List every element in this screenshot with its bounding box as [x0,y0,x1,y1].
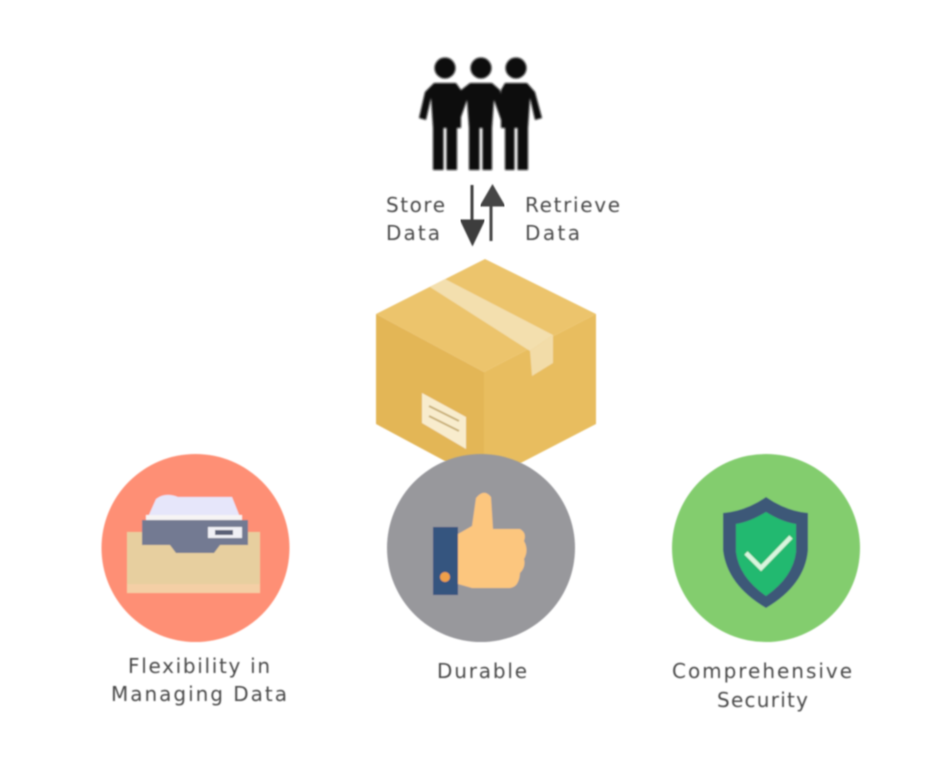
label: flexibility in managing data: Flexibility in [128,654,270,678]
icon: shield [723,497,808,608]
panel: durable circle [387,454,575,642]
label: store data: Data [386,221,440,245]
icon: thumbs up [433,493,526,595]
panel: security circle [672,454,860,642]
label: flexibility in managing data: Managing Data [111,682,287,706]
label: comprehensive security: Comprehensive [672,659,852,683]
label: store data: Store [386,193,445,217]
icon: cardboard box [376,259,596,482]
label: durable: Durable [437,659,527,683]
arrow: store data down [462,185,483,243]
label: comprehensive security: Security [717,688,808,712]
panel: flexibility circle [102,454,290,642]
icon: three people [419,58,542,170]
label: retrieve data: Data [525,221,580,245]
label: retrieve data: Retrieve [525,193,620,217]
arrow: retrieve data up [482,187,503,241]
icon: file tray [127,495,260,593]
